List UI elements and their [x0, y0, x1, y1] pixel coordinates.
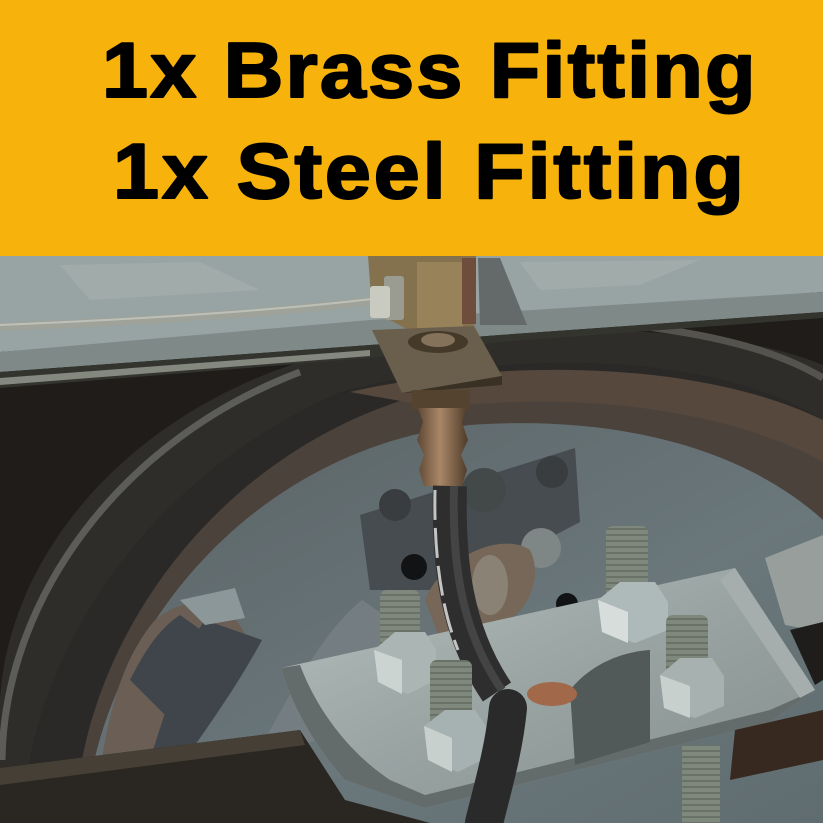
dark wheel well background — [0, 256, 823, 823]
heading line 2: 1x Steel Fitting — [113, 128, 747, 215]
steel brake line — [0, 301, 372, 327]
brake backing plate with bolts — [360, 448, 580, 640]
hose end in foreground — [484, 708, 508, 823]
brake drum rim — [0, 326, 823, 823]
photo: trailer brake hose fitting — [0, 256, 823, 823]
heading line 1: 1x Brass Fitting — [102, 27, 758, 114]
steel fitting and brass tee block — [368, 256, 527, 393]
U-bolt studs and nuts — [374, 526, 724, 772]
brass hose fitting — [412, 390, 470, 486]
frame rail and leaf spring — [0, 622, 823, 823]
galvanised steel trailer frame — [0, 256, 823, 388]
heading — [102, 27, 758, 215]
yellow heading banner — [0, 0, 823, 256]
black rubber brake hose — [435, 486, 502, 692]
steel mounting bracket — [281, 568, 815, 808]
